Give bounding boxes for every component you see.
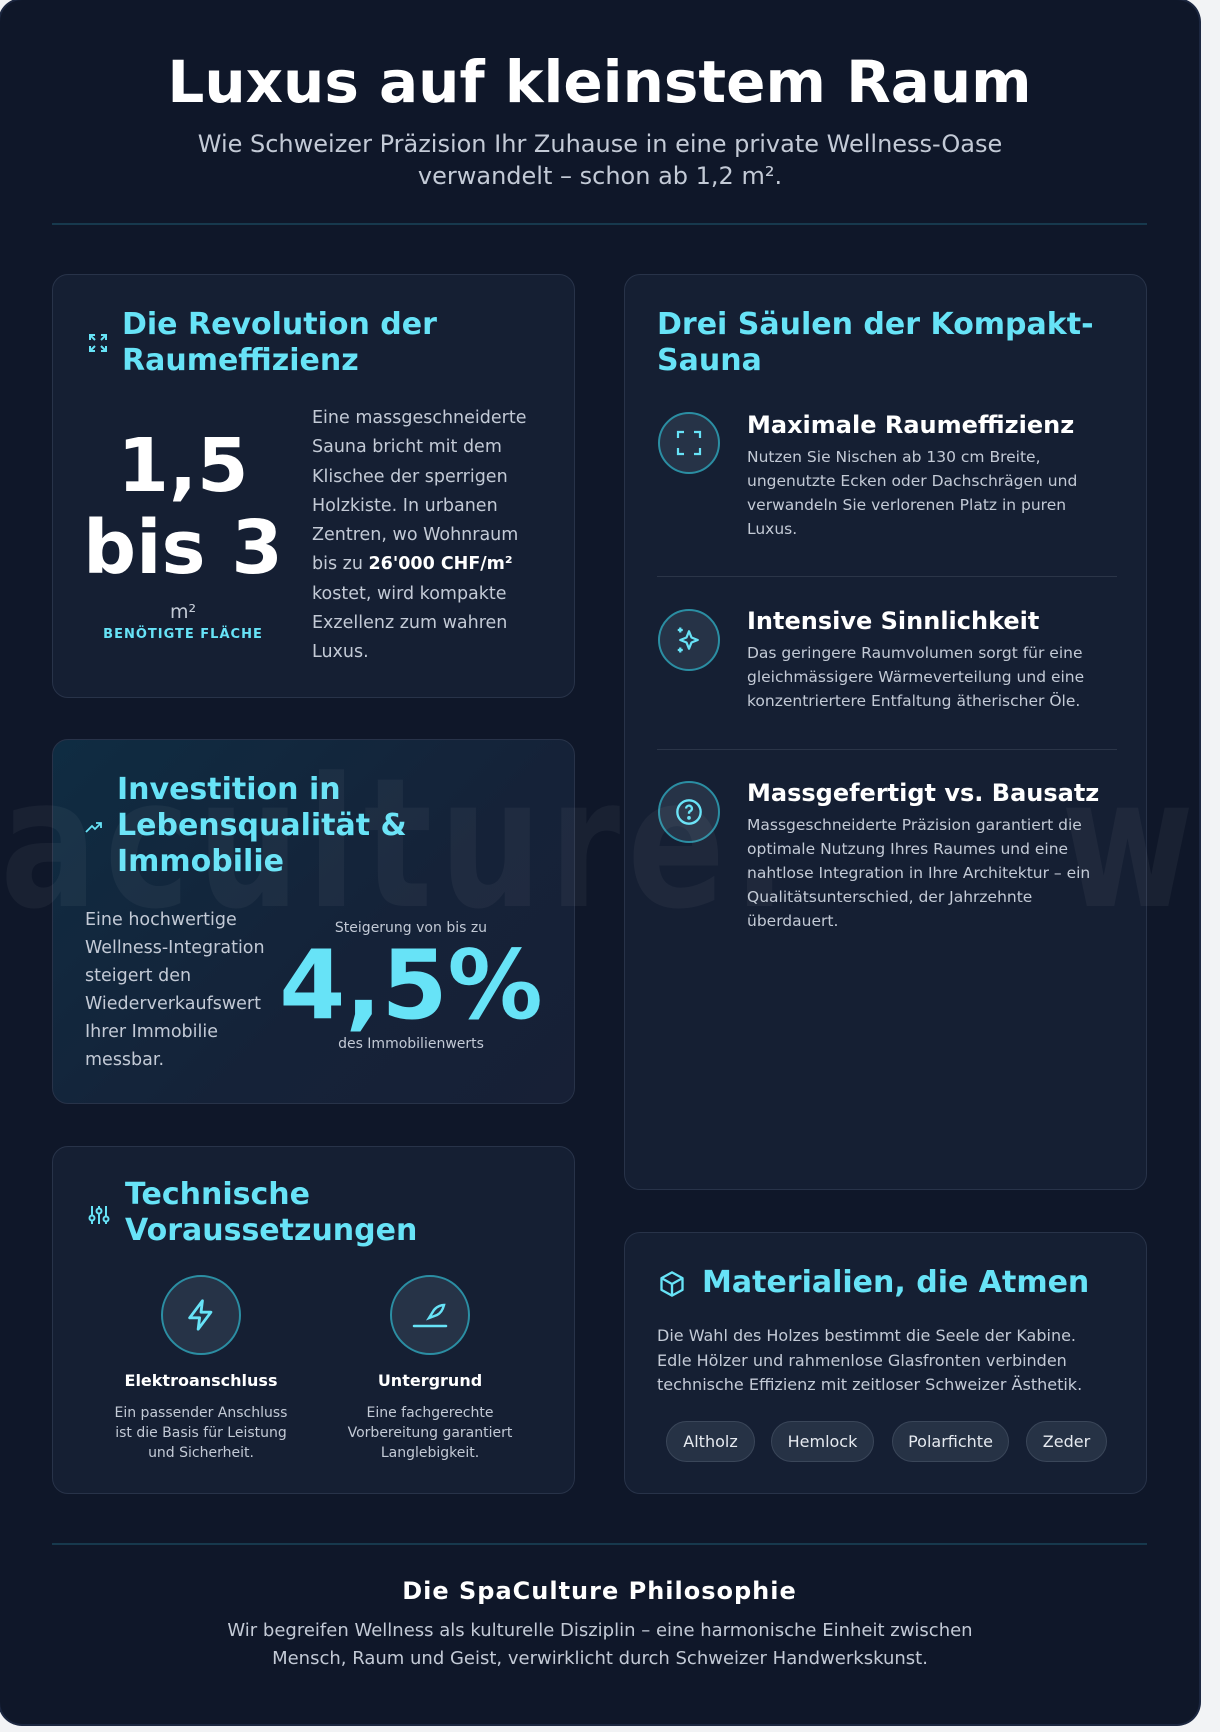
big stat: 1,5 xyxy=(117,423,249,509)
big stat: m² xyxy=(170,601,196,623)
icon: bolt xyxy=(161,1275,241,1355)
item: untergrund xyxy=(348,1275,512,1461)
panel: technical: Untergrund xyxy=(378,1371,482,1390)
footer text: Wir begreifen Wellness als kulturelle Disziplin – eine harmonische Einheit zwischen Mensch, Raum und Geist, verwirklicht durch Schweizer Handwerkskunst. xyxy=(227,1620,973,1669)
watermark xyxy=(0,740,1199,949)
icon: level xyxy=(390,1275,470,1355)
heading: Drei Säulen der Kompakt-Sauna xyxy=(657,307,1094,378)
footer heading: Die SpaCulture Philosophie xyxy=(402,1577,797,1605)
pillar 2: Intensive Sinnlichkeit xyxy=(747,607,1039,635)
pillar 1 xyxy=(658,411,1077,538)
pillar 3: Massgeschneiderte Präzision garantiert die optimale Nutzung Ihres Raumes und eine nahtlose Integration in Ihre Architektur – ein Qualitätsunterschied, der Jahrzehnte überdauert. xyxy=(747,816,1090,930)
heading: Technische Voraussetzungen xyxy=(125,1177,417,1248)
text: Die Wahl des Holzes bestimmt die Seele der Kabine. Edle Hölzer und rahmenlose Glasfronten verbinden technische Effizienz mit zeitloser Schweizer Ästhetik. xyxy=(657,1326,1082,1394)
panel: invest xyxy=(52,739,575,1104)
panel: three pillars xyxy=(624,274,1147,1190)
icon: sliders xyxy=(88,1206,110,1224)
text block: Eine massgeschneiderte Sauna bricht mit dem Klischee der sperrigen Holzkiste. In urbanen Zentren, wo Wohnraum bis zu 26'000 CHF/m² kostet, wird kompakte Exzellenz zum wahren Luxus. xyxy=(312,408,526,662)
panel: technical: Elektroanschluss xyxy=(125,1371,277,1390)
pillar 1: Maximale Raumeffizienz xyxy=(747,411,1074,439)
pills xyxy=(666,1421,755,1462)
item: elektro xyxy=(114,1275,287,1461)
panel: technical: Eine fachgerechte Vorbereitung garantiert Langlebigkeit. xyxy=(348,1405,512,1461)
pillar 3 xyxy=(658,779,1099,930)
panel: materials: Zeder xyxy=(1043,1432,1090,1451)
stat 4,5%: 4,5% xyxy=(279,931,543,1041)
icon: expand xyxy=(89,334,107,352)
heading: Die Revolution der Raumeffizienz xyxy=(122,307,437,378)
panel: revolution xyxy=(52,274,575,698)
pills: Altholz xyxy=(683,1432,738,1451)
title: Luxus auf kleinstem Raum xyxy=(167,48,1032,116)
pillar 2 xyxy=(658,607,1084,710)
big stat xyxy=(83,423,283,642)
pillar 3: Massgefertigt vs. Bausatz xyxy=(747,779,1099,807)
pillar 1: Nutzen Sie Nischen ab 130 cm Breite, ungenutzte Ecken oder Dachschrägen und verwandeln Sie verlorenen Platz in puren Luxus. xyxy=(747,448,1077,538)
stat 4,5%: des Immobilienwerts xyxy=(338,1036,484,1052)
heading: Materialien, die Atmen xyxy=(702,1265,1089,1300)
panel: technical: Ein passender Anschluss ist die Basis für Leistung und Sicherheit. xyxy=(114,1405,287,1461)
big stat: BENÖTIGTE FLÄCHE xyxy=(103,627,263,642)
icon: trend xyxy=(85,822,102,833)
stat 4,5%: Steigerung von bis zu xyxy=(335,920,487,936)
panel: materials xyxy=(624,1232,1147,1494)
icon: sparkle xyxy=(658,609,720,671)
panel: technical xyxy=(52,1146,575,1494)
subtitle: Wie Schweizer Präzision Ihr Zuhause in eine private Wellness-Oase verwandelt – schon ab 1,2 m². xyxy=(198,130,1002,190)
icon: question xyxy=(658,781,720,843)
panel: materials: Hemlock xyxy=(788,1432,857,1451)
heading: Investition in Lebensqualität & Immobilie xyxy=(117,772,407,879)
pillar 2: Das geringere Raumvolumen sorgt für eine gleichmässigere Wärmeverteilung und eine konzentriertere Entfaltung ätherischer Öle. xyxy=(747,644,1084,710)
big stat: bis 3 xyxy=(83,505,283,591)
icon: frame xyxy=(658,412,720,474)
panel: materials: Polarfichte xyxy=(908,1432,993,1451)
icon: cube xyxy=(660,1271,684,1297)
text: Eine hochwertige Wellness-Integration steigert den Wiederverkaufswert Ihrer Immobilie messbar. xyxy=(85,910,265,1070)
